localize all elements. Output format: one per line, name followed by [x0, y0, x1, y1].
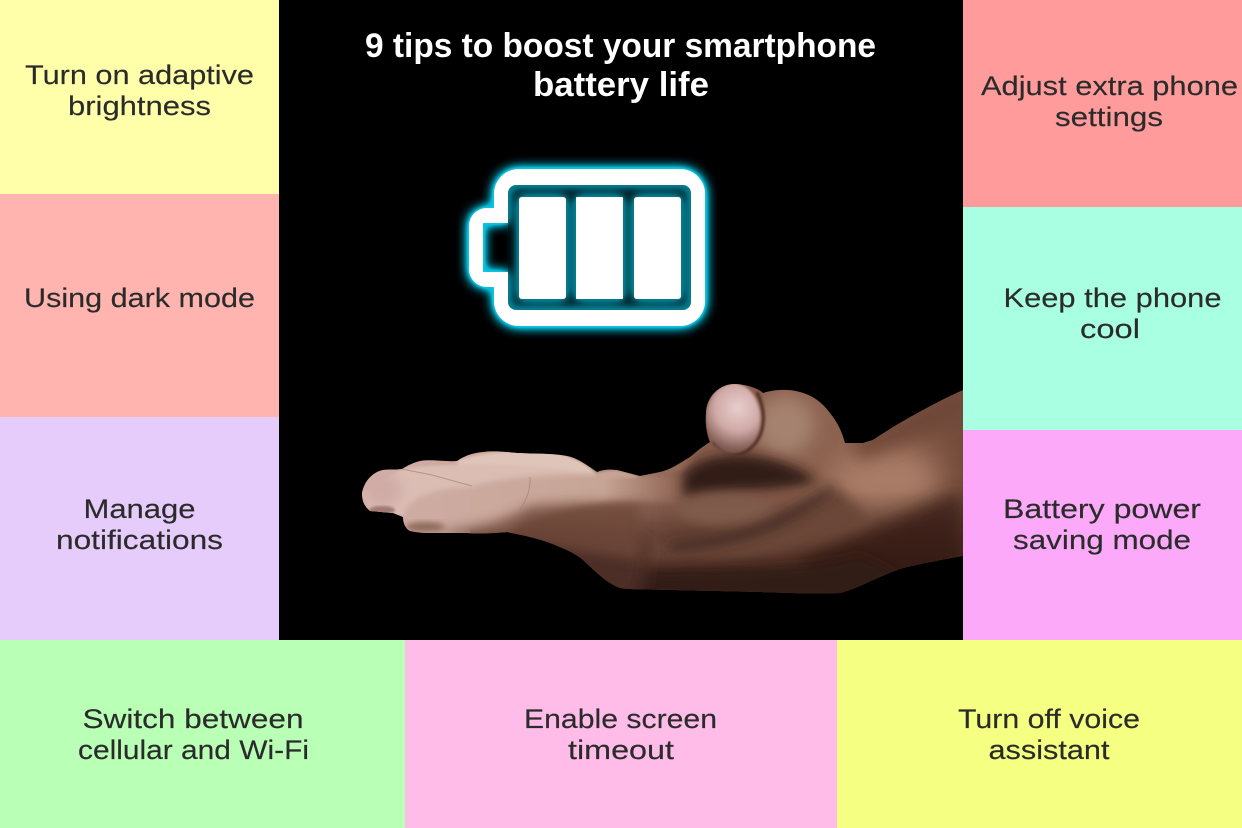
panel: Manage notifications: notifications — [56, 525, 223, 555]
panel: Turn off voice assistant: Turn off voice — [958, 704, 1140, 734]
panel: Adjust extra phone settings: settings — [1055, 102, 1163, 132]
thumb base — [755, 395, 815, 455]
panel: Turn on adaptive brightness — [0, 0, 279, 194]
panel: Enable screen timeout: Enable screen — [524, 704, 717, 734]
finger: ring tip — [598, 470, 638, 478]
mid palm band — [648, 487, 864, 564]
panel: Turn on adaptive brightness: Turn on adaptive — [25, 60, 254, 90]
title: battery life — [533, 66, 709, 104]
forearm top shade — [850, 385, 963, 460]
panel: Turn on adaptive brightness: brightness — [68, 91, 211, 121]
panel: Switch between cellular and Wi-Fi: Switch between — [82, 704, 304, 734]
middle fingertip — [362, 473, 402, 507]
panel: Turn off voice assistant: assistant — [988, 735, 1110, 765]
finger creases — [402, 469, 530, 510]
thumb contour — [713, 392, 763, 453]
palm mound — [675, 494, 775, 526]
thumb tip — [706, 383, 760, 453]
bottom shadow — [640, 561, 880, 594]
forearm lower shade — [804, 486, 963, 572]
title — [365, 27, 876, 104]
title: 9 tips to boost your smartphone — [365, 27, 876, 65]
panel: Switch between cellular and Wi-Fi: cellular and Wi-Fi — [78, 735, 309, 765]
center black panel — [279, 0, 963, 640]
shadow under thumb — [682, 455, 818, 498]
panel: Keep the phone cool: Keep the phone — [1004, 283, 1222, 313]
panel: Manage notifications: Manage — [84, 494, 196, 524]
panel: Adjust extra phone settings — [963, 0, 1242, 207]
panel: Battery power saving mode: Battery power — [1003, 494, 1201, 524]
web between thumb and index — [662, 456, 691, 472]
panel: Turn off voice assistant — [837, 640, 1242, 828]
finger: index — [403, 474, 700, 532]
panel: Keep the phone cool — [963, 207, 1242, 430]
panel: Battery power saving mode — [963, 430, 1242, 640]
hand photo illustration — [362, 384, 963, 594]
palm crease — [668, 488, 834, 547]
panel: Switch between cellular and Wi-Fi — [0, 640, 405, 828]
panel: Using dark mode — [0, 194, 279, 417]
panel: Using dark mode: Using dark mode — [24, 283, 255, 313]
index lower shading — [430, 503, 640, 560]
lower palm shading — [511, 531, 652, 589]
finger: middle — [368, 464, 564, 517]
forearm highlight — [830, 446, 940, 514]
panel: Enable screen timeout — [405, 640, 837, 828]
panel: Battery power saving mode: saving mode — [1013, 525, 1191, 555]
finger: back — [457, 451, 597, 478]
icon: glowing battery — [469, 169, 705, 326]
underside gradient — [470, 497, 963, 594]
panel: Adjust extra phone settings: Adjust extra phone — [981, 71, 1238, 101]
panel: Keep the phone cool: cool — [1080, 314, 1140, 344]
panel: Manage notifications — [0, 417, 279, 640]
fingertip lower shading — [405, 522, 445, 532]
panel: Enable screen timeout: timeout — [568, 735, 675, 765]
